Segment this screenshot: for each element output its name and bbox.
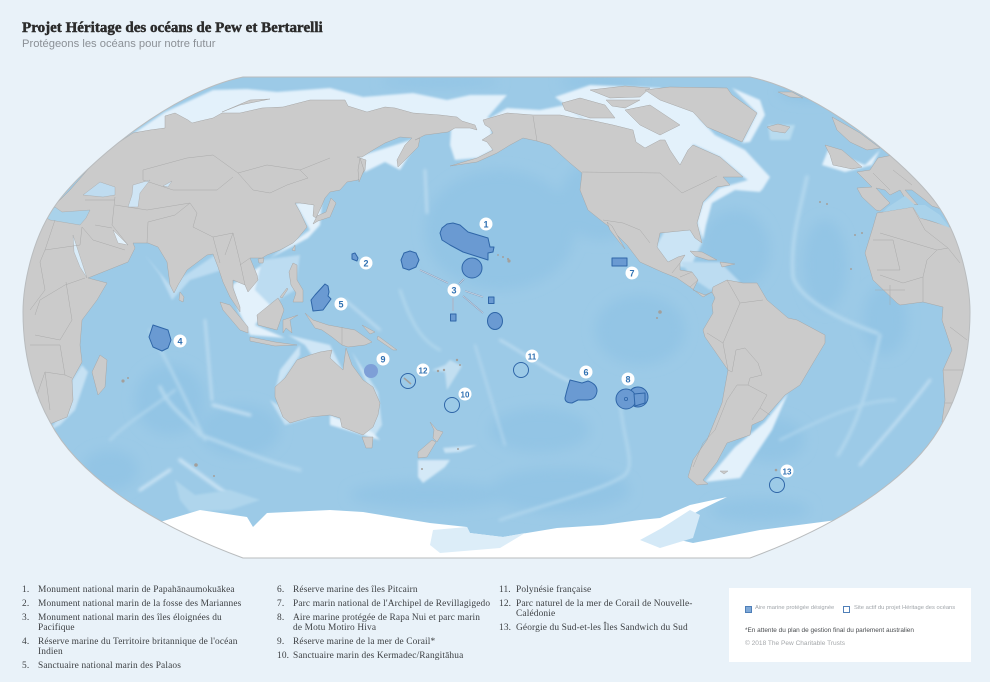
shelf: Fiji plateau: [432, 360, 462, 390]
badge 4: [174, 334, 186, 348]
land: Palawan: [280, 288, 288, 298]
shelf: Gulf of Mexico: [655, 225, 702, 268]
shelf: Campbell Plateau: [418, 460, 450, 483]
land: Taiwan: [292, 245, 295, 251]
shelf: Sea of Okhotsk: [358, 138, 411, 172]
site list: column 3: Calédonie: [516, 609, 555, 619]
zone 3: Pacific remote islands: [401, 251, 502, 330]
badge 8: 8: [625, 374, 631, 384]
land: Tasmania: [362, 437, 373, 448]
ocean base: [20, 75, 975, 560]
land: Madagascar: [92, 355, 107, 395]
site list: column 2: 9.: [277, 637, 284, 647]
land: Sulawesi: [283, 315, 298, 333]
active sites: [400, 362, 784, 492]
site list: column 1: Indien: [38, 647, 63, 657]
badge 10: 10: [461, 390, 470, 399]
badge 5: 5: [338, 299, 344, 309]
site list: column 1: 4.: [22, 637, 29, 647]
badge 1: [480, 218, 492, 230]
mid-ocean ridges: [110, 170, 930, 520]
land: Asia, Arabia and East Africa: [0, 100, 477, 424]
land: New Zealand North Island: [430, 422, 443, 442]
shelf: Chatham Rise: [443, 445, 477, 453]
land: New Guinea: [305, 313, 372, 347]
shelf: Great Barrier: [352, 352, 382, 440]
legend swatch: active site: [843, 606, 850, 613]
shelf: Labrador: [692, 118, 771, 190]
deep ocean shading: [82, 77, 907, 522]
site list: column 3: 12.: [499, 599, 511, 609]
land: Sumatra: [220, 302, 248, 333]
site list: column 2: [277, 585, 490, 661]
land: New Britain: [362, 325, 375, 334]
site list: column 1: Sanctuaire national marin des Palaos: [38, 661, 181, 671]
site list: column 2: Aire marine protégée de Rapa Nui et parc marin: [293, 613, 480, 623]
badge 5: [334, 298, 348, 310]
badge 1: 1: [483, 219, 489, 229]
number badges: [174, 218, 794, 478]
shelf: Caribbean: [680, 262, 740, 290]
zone 13: South Georgia: [770, 478, 784, 492]
land: Ellesmere Island: [590, 86, 650, 98]
badge 13: 13: [783, 467, 792, 476]
site list: column 2: 8.: [277, 613, 284, 623]
shelf: Bering Sea: [450, 118, 493, 160]
shelf: East Greenland: [732, 88, 765, 143]
zone 6: Pitcairn: [565, 380, 597, 403]
shelf: Patagonia: [705, 393, 788, 482]
legend label: active site: Site actif du projet Héritage des océans: [854, 605, 955, 611]
legend panel: [729, 588, 971, 662]
site list: column 3: 11.: [499, 585, 511, 595]
land: Hainan: [258, 258, 264, 263]
country borders: [30, 116, 967, 467]
badge 7: [626, 266, 638, 280]
Antarctica ice: [162, 497, 832, 558]
zone 1: Papahānaumokuākea: [440, 223, 494, 260]
zone 7: Revillagigedo: [612, 258, 627, 266]
site list: column 1: Monument national marin de Papahānaumokuākea: [38, 585, 235, 595]
Mediterranean, Black, Caspian and Red seas: [45, 180, 950, 278]
land masses: [0, 86, 990, 485]
land: Australia: [275, 348, 380, 435]
land: Melville Island: [606, 100, 640, 108]
site list: column 1: 3.: [22, 613, 29, 623]
zone 2: Mariannes: [352, 253, 358, 261]
badge 12: [416, 364, 430, 376]
shelf: Arafura: [290, 335, 343, 370]
land: Borneo: [257, 298, 284, 330]
land: Hispaniola: [720, 262, 735, 267]
badge 2: [360, 256, 372, 270]
badge 7: 7: [629, 268, 635, 278]
badge 11: [526, 350, 538, 362]
land: Cuba: [690, 251, 717, 260]
badge 13: [780, 464, 794, 478]
site list: column 3: Polynésie française: [516, 585, 591, 595]
badge 9: [376, 352, 390, 366]
land: Sakhalin: [358, 158, 364, 182]
land: Svalbard: [778, 92, 803, 98]
legend swatch: designated: [745, 606, 752, 613]
shelf: Alaska Arctic: [490, 104, 584, 119]
badge 10: [458, 388, 472, 400]
site list: column 2: de Motu Motiro Hiva: [293, 623, 376, 633]
land: Java: [250, 337, 297, 346]
site list: column 3: [499, 585, 693, 633]
site list: column 1: 1.: [22, 585, 29, 595]
land: North America: [450, 113, 743, 297]
zone 12: New Caledonia: [400, 374, 416, 388]
site list: column 2: Parc marin national de l'Archipel de Revillagigedo: [293, 599, 490, 609]
site list: column 3: Géorgie du Sud-et-les Îles Sandwich du Sud: [516, 623, 688, 633]
world map: [22, 76, 970, 558]
badge 3: [448, 284, 460, 296]
land: Novaya Zemlya: [222, 99, 270, 112]
badge 3: 3: [451, 285, 457, 295]
land: Scandinavia: [832, 117, 880, 150]
zone 11: French Polynesia: [514, 362, 528, 378]
land: Baja California: [607, 222, 625, 249]
badge 2: 2: [363, 258, 369, 268]
site list: column 1: 2.: [22, 599, 29, 609]
protected areas: [149, 223, 648, 409]
zone 10: Kermadec: [444, 398, 460, 412]
site list: column 2: Sanctuaire marin des Kermadec/Rangitāhua: [293, 651, 463, 661]
site list: column 1: Pacifique: [38, 623, 75, 633]
leader lines for zone 3: [420, 270, 483, 313]
small islands: [121, 201, 863, 477]
land: Banks and Victoria Islands: [562, 98, 615, 118]
badge 4: 4: [177, 336, 183, 346]
land: Baffin Island: [625, 105, 680, 135]
site list: column 2: Réserve marine des îles Pitcairn: [293, 585, 418, 595]
badge 11: 11: [528, 352, 537, 361]
copyright: © 2018 The Pew Charitable Trusts: [745, 640, 845, 647]
land: New Zealand South Island: [418, 440, 436, 458]
polar and continental shelf shallows: [50, 85, 880, 512]
land: United Kingdom and Ireland: [825, 145, 862, 169]
land: Iceland: [767, 124, 790, 133]
site list: column 1: [22, 585, 241, 671]
badge 6: 6: [583, 367, 589, 377]
footnote: *En attente du plan de gestion final du parlement australien: [745, 627, 914, 634]
shelf: East Coast of North America: [697, 179, 762, 240]
badge 6: [580, 366, 592, 378]
zone 9: Coral Sea: [364, 364, 378, 378]
site list: column 1: Réserve marine du Territoire britannique de l'océan: [38, 637, 238, 647]
land: Greenland: [645, 87, 757, 142]
site list: column 1: Monument national marin des îles éloignées du: [38, 613, 222, 623]
badge 12: 12: [419, 366, 428, 375]
map outline: [23, 77, 970, 558]
zone 5: Palau: [311, 284, 331, 311]
legend label: designated: Aire marine protégée désignée: [755, 605, 834, 611]
shelf: South China Sea: [255, 255, 300, 305]
land: Western Europe: [857, 155, 950, 212]
land: Philippines: [289, 263, 303, 302]
site list: column 2: Réserve marine de la mer de Corail*: [293, 637, 435, 647]
title: Projet Héritage des océans de Pew et Bertarelli: [22, 20, 323, 36]
site list: column 1: Monument national marin de la fosse des Mariannes: [38, 599, 241, 609]
land: Falkland Islands: [720, 471, 728, 474]
shelf: Sunda: [232, 265, 285, 338]
site list: column 2: 6.: [277, 585, 284, 595]
site list: column 3: 13.: [499, 623, 511, 633]
shelf: East China Sea: [270, 200, 322, 258]
land: Sri Lanka: [179, 292, 184, 302]
site list: column 3: Parc naturel de la mer de Corail de Nouvelle-: [516, 599, 693, 609]
site list: column 1: 5.: [22, 661, 29, 671]
badge 9: 9: [380, 354, 386, 364]
land: Solomon islands: [377, 336, 397, 350]
shelf: North Sea: [822, 150, 880, 172]
zone 8: Rapa Nui and Motu Motiro Hiva: [616, 387, 648, 409]
zone 4: British Indian Ocean Territory: [149, 325, 171, 351]
subtitle: Protégeons les océans pour notre futur: [22, 38, 215, 50]
land: West and Southern Africa: [865, 207, 990, 424]
land: Japan: [313, 198, 336, 224]
badge 8: [622, 372, 634, 386]
site list: column 2: 7.: [277, 599, 284, 609]
land: South America: [688, 280, 825, 485]
shelf: Siberian Arctic: [130, 87, 507, 135]
site list: column 2: 10.: [277, 651, 289, 661]
shelf: Canadian Arctic and Hudson Bay: [555, 85, 700, 168]
